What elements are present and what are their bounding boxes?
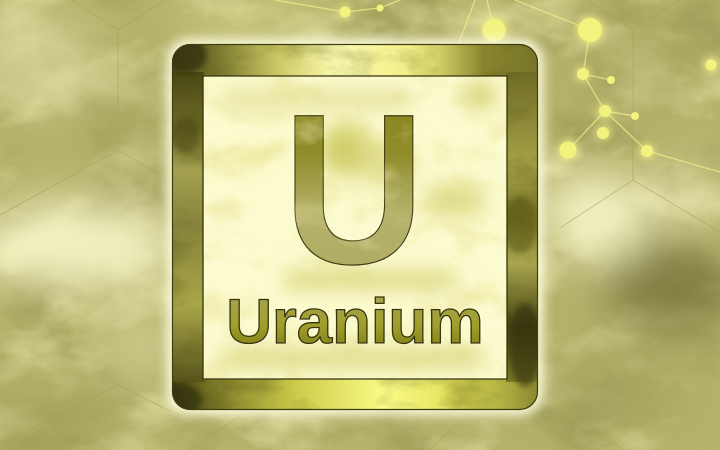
big symbol U: U [284, 71, 426, 310]
element name: Uranium: Uranium [227, 288, 485, 358]
tile frame [158, 37, 541, 416]
inner panel [203, 76, 507, 379]
big symbol U [294, 115, 414, 266]
element tile: uranium [158, 37, 543, 416]
tile frame outline [172, 44, 538, 410]
element name: Uranium: Uranium [226, 287, 484, 357]
big symbol U: U [283, 70, 425, 309]
molecule network: top right [275, 0, 720, 172]
tile outer glow [167, 39, 543, 415]
inner panel border [203, 76, 507, 379]
